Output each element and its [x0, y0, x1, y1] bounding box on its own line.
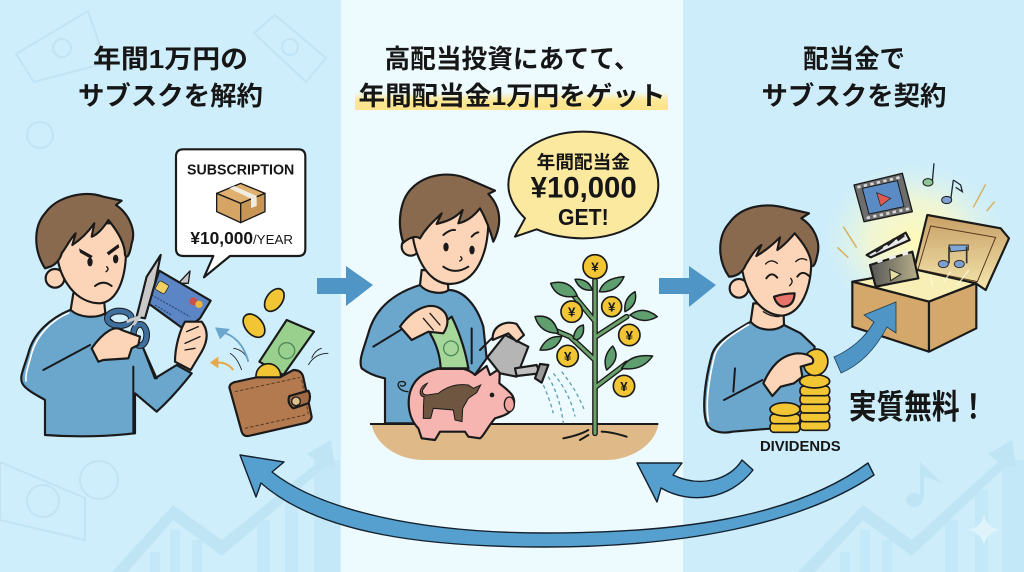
arrow: dividends back to investment	[637, 460, 753, 502]
person cutting card	[21, 194, 192, 436]
speech bubble: annual dividend: 年間配当金	[537, 151, 630, 172]
wallet	[229, 364, 312, 436]
glow	[824, 163, 1004, 317]
yen coins: ¥	[620, 379, 628, 394]
open box with clapperboard	[852, 215, 1009, 352]
heading: step 2 with highlight: 高配当投資にあてて、	[384, 44, 640, 74]
speech bubble: annual dividend: GET!	[558, 204, 609, 230]
yen coins: ¥	[564, 349, 572, 364]
heading: step 1: サブスクを解約	[78, 81, 263, 111]
flying coins and bill	[230, 285, 328, 375]
heading: step 3	[762, 44, 946, 111]
callout: effectively free: 実質無料！	[849, 389, 987, 426]
speech bubble: annual dividend	[508, 132, 658, 238]
yen coins: ¥	[568, 305, 576, 320]
arrow: step 1 to step 2	[317, 266, 373, 306]
arrow: long return loop	[240, 455, 874, 547]
speech bubble: annual dividend: ¥10,000	[531, 171, 637, 204]
arrow: step 2 to step 3	[659, 266, 716, 307]
money tree	[535, 255, 657, 440]
person smiling	[704, 205, 818, 433]
background decoration: left panel	[0, 11, 340, 572]
heading: step 3: 配当金で	[803, 44, 905, 74]
heading: step 2 with highlight: 年間配当金1万円をゲット	[358, 81, 666, 111]
bill and hand	[400, 306, 468, 368]
heading: step 1	[78, 44, 263, 111]
background decoration: right panel	[798, 440, 1024, 572]
speech bubble: subscription	[176, 149, 305, 277]
speech bubble: subscription: ¥10,000/YEAR	[190, 228, 293, 248]
ground	[370, 424, 658, 460]
heading: step 1: 年間1万円の	[93, 44, 248, 74]
motion arrows	[210, 327, 248, 370]
water drops	[543, 372, 585, 423]
panel: cancel subscription illustration	[21, 149, 328, 436]
speech bubble: subscription: SUBSCRIPTION	[187, 162, 294, 178]
yen coins: ¥	[591, 260, 599, 275]
heading: step 3: サブスクを契約	[762, 81, 946, 111]
credit card and scissors	[107, 255, 211, 346]
panel: subscribe with dividends illustration	[704, 163, 1009, 455]
panel: investment illustration	[361, 132, 658, 460]
yen coins: ¥	[608, 300, 616, 315]
bull silhouette	[420, 383, 481, 422]
label: dividends: DIVIDENDS	[760, 439, 841, 455]
watering can	[487, 323, 548, 383]
hands	[92, 322, 207, 370]
arrow: dividends to box	[834, 302, 896, 373]
floating media icons	[837, 163, 995, 258]
heading: step 2 with highlight	[355, 44, 668, 111]
person investing	[361, 175, 499, 423]
yen coins	[557, 255, 640, 397]
yen coins: ¥	[626, 328, 634, 343]
coin stacks	[763, 346, 832, 432]
piggy bank	[398, 366, 514, 440]
